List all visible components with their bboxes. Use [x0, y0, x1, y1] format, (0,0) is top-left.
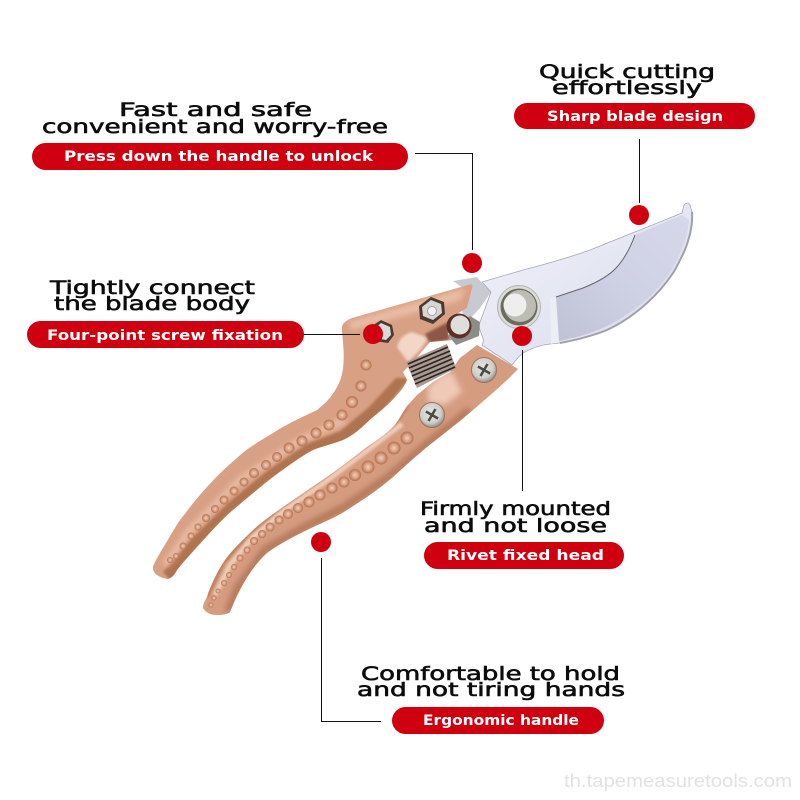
lower handle highlight streak — [215, 424, 402, 595]
marker dots — [311, 205, 649, 552]
upper handle red shadow near pivot — [425, 322, 449, 343]
lower handle dimples — [208, 432, 414, 608]
blade outer edge shade — [560, 212, 692, 343]
heading: Quick cutting — [539, 61, 715, 83]
pill — [27, 321, 304, 348]
blade — [479, 203, 692, 365]
subheading: and not tiring hands — [357, 679, 625, 701]
pill label: Four-point screw fixation — [47, 328, 283, 344]
upper handle central band — [165, 420, 345, 565]
blade bevel — [556, 215, 689, 341]
subheading: the blade body — [54, 293, 250, 315]
callout: four-point screw fixation — [27, 277, 304, 348]
upper handle soft shading — [163, 378, 410, 582]
heading: Firmly mounted — [420, 498, 611, 520]
pill label: Press down the handle to unlock — [64, 149, 374, 165]
callout: rivet fixed head — [420, 498, 624, 569]
pruning shears illustration — [153, 203, 692, 615]
pill label: Sharp blade design — [547, 109, 723, 125]
upper handle dimples — [167, 360, 372, 563]
pill — [514, 103, 755, 129]
callout: press to unlock — [32, 99, 408, 170]
pill — [424, 542, 624, 569]
subheading: and not loose — [424, 515, 607, 537]
spring — [406, 344, 456, 388]
pill — [32, 143, 408, 170]
upper handle boss highlight — [397, 332, 428, 362]
screw lower — [420, 402, 444, 428]
pill label: Ergonomic handle — [423, 713, 579, 729]
subheading: effortlessly — [552, 77, 702, 99]
callout: ergonomic handle — [357, 663, 625, 734]
lower handle dark top edge — [207, 405, 408, 597]
hex nut upper — [419, 297, 445, 324]
pivot bolt — [446, 314, 472, 338]
blade shoulder — [550, 297, 559, 344]
rivet — [498, 286, 540, 328]
subheading: convenient and worry-free — [42, 116, 388, 138]
lower handle — [203, 345, 518, 615]
watermark: th.tapemeasuretools.com — [564, 770, 792, 791]
blade tang — [453, 277, 491, 322]
screw upper — [472, 358, 496, 382]
hex nut lower — [372, 320, 394, 343]
blade ground edge — [556, 235, 635, 297]
lower handle boss highlight — [428, 372, 462, 405]
callout: sharp blade design — [514, 61, 755, 129]
leader lines — [304, 139, 640, 722]
pill label: Rivet fixed head — [447, 548, 604, 564]
heading: Tightly connect — [49, 277, 255, 299]
lower handle lower shade — [228, 410, 470, 612]
heading: Comfortable to hold — [361, 663, 620, 685]
heading: Fast and safe — [119, 99, 312, 121]
upper handle top highlight — [348, 288, 466, 330]
silver linkage behind pivot — [448, 316, 480, 345]
pill — [392, 707, 604, 734]
upper handle — [153, 284, 472, 582]
